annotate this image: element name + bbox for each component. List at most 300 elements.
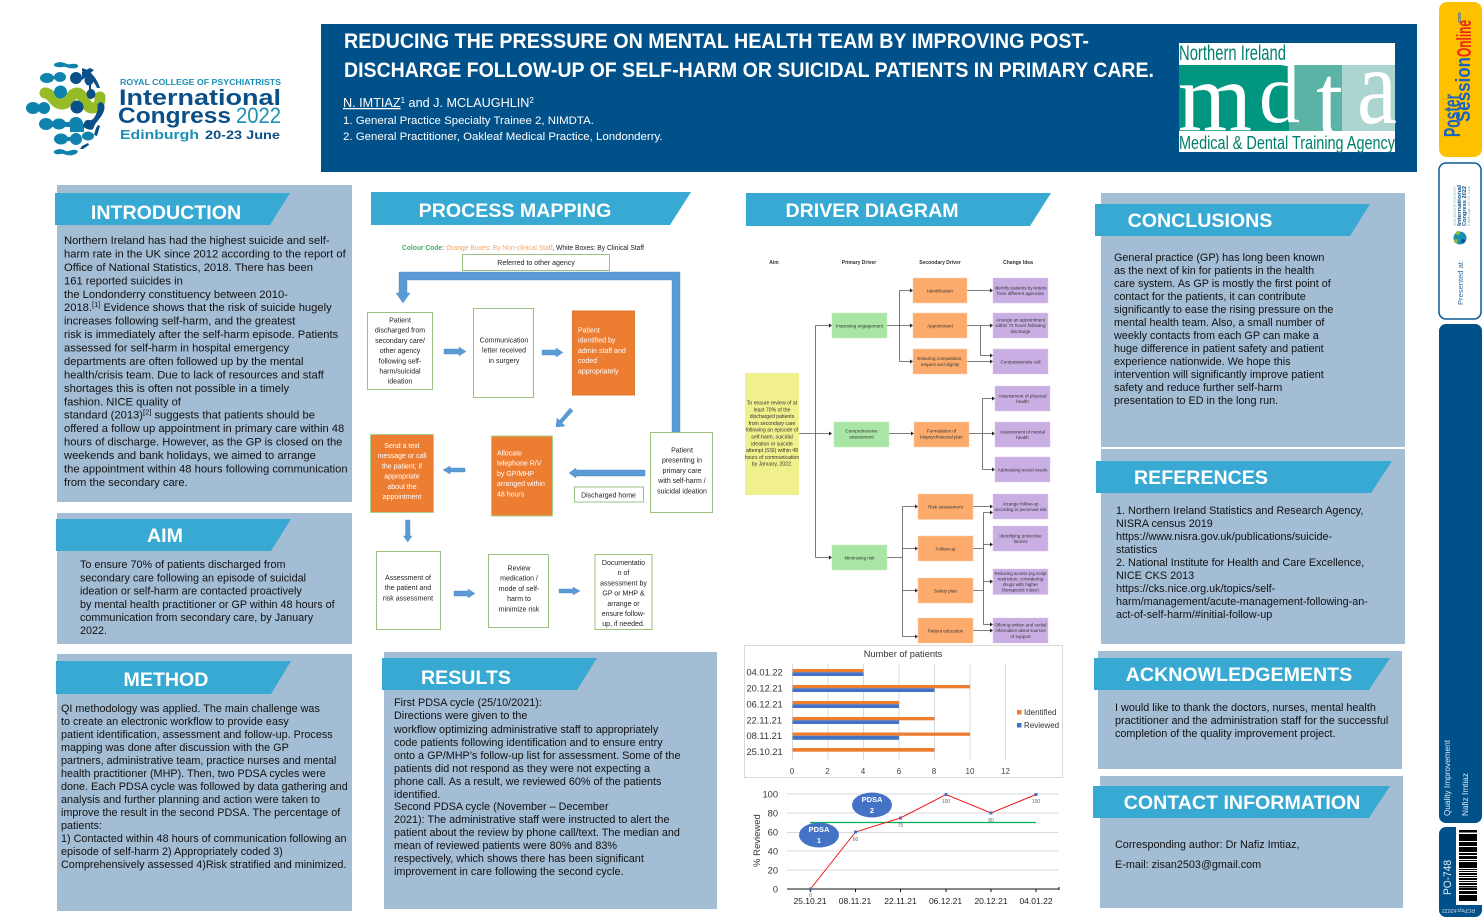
box: allocate telephone review: by GP/MHP	[497, 471, 534, 478]
box: patient presenting	[650, 432, 712, 512]
box: assessment: Assessment of	[385, 575, 431, 582]
text: results: onto a GP/MHP’s follow-up list for assessment. Some of the	[394, 750, 680, 762]
secondary drivers: biopsychosocial plan	[920, 434, 963, 440]
text: references: https://www.nisra.gov.uk/publications/suicide-	[1116, 531, 1333, 543]
heading: introduction: INTRODUCTION	[91, 202, 241, 224]
value axis labels	[790, 767, 1010, 776]
callout: PDSA 2: 2	[870, 806, 874, 815]
box: patient discharged: harm/suicidal	[379, 368, 421, 376]
text: results: patients did not respond as they were not expecting a	[394, 763, 651, 775]
barcode	[1456, 827, 1482, 905]
text: references: 2. National Institute for Health and Care Excellence,	[1116, 557, 1364, 569]
change ideas: discharge	[1011, 329, 1031, 334]
text: introduction: Northern Ireland has had the highest suicide and self-	[64, 235, 330, 247]
box: documentation: arrange or	[607, 601, 640, 608]
text: introduction: Evidence shows that the risk of suicide hugely	[100, 302, 332, 314]
change ideas: Identify patients by letters	[994, 286, 1047, 290]
box: patient presenting: presenting in	[662, 458, 702, 465]
x axis labels	[793, 896, 1053, 906]
text: acknowledgements: completion of the quality improvement project.	[1115, 728, 1336, 740]
y axis labels: 80	[768, 808, 778, 818]
change ideas	[993, 278, 1050, 643]
authors and affiliations: 2. General Practitioner, Oakleaf Medical Practice, Londonderry.	[343, 131, 663, 143]
text: method: mapping was done after discussion with the GP	[61, 742, 289, 754]
value axis labels: 4	[861, 767, 866, 776]
chart: number of patients bar chart	[744, 646, 1062, 778]
legend: Reviewed	[1024, 721, 1059, 730]
text: introduction: increases following self-harm, and the greatest	[64, 316, 296, 328]
box: patient identified: identified by	[578, 338, 616, 345]
aim box: ideation or suicide	[751, 441, 793, 447]
secondary drivers: Safety plan	[934, 588, 957, 594]
text: results: mean of reviewed patients were 80% and 83%	[394, 840, 617, 852]
value axis labels: 8	[932, 767, 937, 776]
category labels: 25.10.21	[746, 747, 783, 757]
box: documentation	[595, 554, 652, 630]
panel: aim	[56, 513, 352, 644]
text: results: patient about the review by phone call/text. The median and	[394, 827, 680, 839]
text: conclusions: significantly to ease the rising pressure on the	[1114, 304, 1333, 316]
y axis labels: 40	[768, 846, 778, 856]
text: contact details: Corresponding author: Dr Nafiz Imtiaz,	[1115, 839, 1300, 851]
callout: PDSA 1: 1	[817, 836, 821, 845]
aim box: discharged patients	[750, 414, 795, 420]
heading: process mapping: PROCESS MAPPING	[419, 200, 611, 222]
panel: contact information	[1093, 776, 1403, 908]
text: conclusions: mental health team. Also, a small number of	[1114, 317, 1325, 329]
box: patient identified: appropriately	[578, 368, 619, 375]
bars: identified	[792, 669, 970, 752]
change ideas: factors	[1014, 539, 1028, 544]
secondary drivers: Appointment	[927, 324, 954, 328]
heading: results	[382, 658, 597, 690]
heading: method: METHOD	[124, 669, 208, 691]
aim box: least 70% of the	[754, 407, 791, 413]
text: method: health practitioner (MHP). Then, two PDSA cycles were	[61, 768, 326, 780]
heading: results: RESULTS	[421, 667, 511, 689]
secondary drivers: Formulation of	[927, 428, 957, 434]
legend: Identified	[1024, 708, 1056, 717]
aim box: hours of communication	[745, 455, 799, 461]
box: patient discharged: discharged from	[375, 328, 425, 335]
aim box: To ensure review of at	[747, 400, 798, 406]
logo text: ROYAL COLLEGE OF PSYCHIATRISTS	[120, 77, 281, 87]
heading: driver diagram: DRIVER DIAGRAM	[785, 200, 959, 222]
chart: percent reviewed line chart	[752, 790, 1059, 906]
box: review medication: minimize risk	[499, 606, 540, 613]
callout: PDSA 1: PDSA	[809, 825, 830, 834]
text: references: https://cks.nice.org.uk/topics/self-	[1116, 583, 1276, 595]
logo text: 20-23 June	[205, 128, 280, 142]
box: review medication: Review	[508, 566, 531, 572]
text: introduction: the appointment within 48 hours following communication	[64, 464, 348, 476]
text: references: 1. Northern Ireland Statistics and Research Agency,	[1116, 505, 1363, 517]
category labels: 06.12.21	[746, 700, 783, 710]
change ideas: Reducing access (eg script	[994, 571, 1047, 576]
box: send a text message	[370, 434, 434, 512]
text: references: NICE CKS 2013	[1116, 570, 1194, 582]
text: introduction: [2]	[143, 408, 151, 417]
box: patient identified: coded	[578, 358, 597, 365]
change ideas: information about sources	[996, 628, 1046, 633]
logo: NIMDTA: Medical & Dental Training Agency	[1179, 133, 1395, 153]
box: assessment: risk assessment	[383, 595, 433, 602]
sidebar: presented at tab: Presented at:	[1456, 260, 1465, 305]
arrow	[454, 589, 475, 598]
change ideas: Assessment of mental	[1000, 430, 1045, 434]
title: REDUCING THE PRESSURE ON MENTAL HEALTH TEAM BY IMPROVING POST-	[344, 28, 1089, 53]
sidebar: poster number and barcode	[1439, 827, 1482, 917]
change ideas: health	[1016, 435, 1029, 440]
text: results: Second PDSA cycle (November – December	[394, 801, 609, 813]
text: aim: 2022.	[80, 625, 107, 637]
text: results: code patients following identification and to ensure entry	[394, 737, 663, 749]
text: method	[61, 703, 348, 871]
secondary drivers: Ensuring compassion,	[917, 356, 963, 361]
value axis labels: 12	[1001, 767, 1010, 776]
icon: congress brain globe	[26, 62, 104, 155]
box: patient discharged: ideation	[388, 379, 412, 386]
callout: PDSA 2	[852, 792, 892, 818]
heading: acknowledgements: ACKNOWLEDGEMENTS	[1126, 664, 1352, 686]
category labels: 08.11.21	[746, 731, 782, 741]
secondary drivers: Patient education	[928, 628, 964, 634]
text: references: statistics	[1116, 544, 1158, 556]
column headings: Secondary Driver	[919, 260, 961, 266]
x axis labels: 08.11.21	[839, 896, 871, 906]
text: method: done. Each PDSA cycle was followed by data gathering and	[61, 781, 348, 793]
box: patient discharged: Patient	[389, 318, 411, 324]
column headings: Change Idea	[1003, 260, 1033, 266]
text: method: to create an electronic workflow to provide easy	[61, 716, 289, 728]
data labels: 100	[1032, 799, 1040, 805]
change ideas: from different agencies	[997, 291, 1045, 296]
text: method: Comprehensively assessed 4)Risk stratified and minimized.	[61, 859, 346, 871]
text: introduction: fashion. NICE quality of	[64, 396, 182, 408]
sidebar: poster title tab: Nafiz Imtiaz	[1460, 773, 1470, 816]
sidebar: poster session online tab	[1439, 2, 1482, 157]
heading: conclusions	[1095, 204, 1370, 236]
arrow	[569, 468, 645, 478]
text: results: identified.	[394, 789, 440, 801]
change ideas: Arrange an appointment	[996, 318, 1046, 322]
logo text: International	[119, 85, 281, 110]
arrow: diagonal	[556, 408, 573, 427]
logo: Royal College of Psychiatrists International Congress 2022	[26, 62, 281, 155]
primary drivers: Improving engagement	[836, 324, 884, 328]
text: method: improve the result in the second PDSA. The percentage of	[61, 807, 341, 819]
y axis title: % Reviewed	[752, 814, 763, 867]
logo text: 2022	[236, 103, 281, 128]
text: aim: secondary care following an episode of suicidal	[80, 572, 306, 584]
heading: conclusions: CONCLUSIONS	[1128, 210, 1272, 232]
aim box: self-harm, suicidal	[751, 434, 793, 440]
secondary drivers: Identification	[927, 288, 953, 294]
sidebar: poster number and barcode: RCPsych2022	[1442, 907, 1475, 913]
panel: results	[382, 652, 717, 909]
text: aim: communication from secondary care, by January	[80, 612, 314, 624]
box: patient identified: Patient	[578, 328, 600, 334]
box: communication letter: letter received	[482, 348, 526, 355]
category labels: 04.01.22	[746, 668, 783, 678]
logo: NIMDTA: Northern Ireland	[1179, 42, 1286, 65]
box: assessment: the patient and	[385, 585, 431, 592]
change ideas: restriction, considering	[998, 576, 1044, 582]
box: review medication	[488, 554, 548, 628]
change ideas: according to perceived risk	[994, 507, 1047, 512]
box: review medication: harm to	[507, 596, 531, 603]
primary drivers: Minimizing risk	[844, 556, 875, 560]
sidebar: poster number and barcode: PO-748	[1442, 860, 1454, 895]
heading: process mapping	[371, 192, 691, 225]
change ideas: Assessment of physical	[998, 394, 1046, 398]
data labels: 80	[988, 818, 994, 824]
text: references: harm/management/acute-management-following-an-	[1116, 596, 1368, 608]
heading: references: REFERENCES	[1134, 467, 1268, 489]
text: introduction: assessed for self-harm in hospital emergency	[64, 342, 290, 354]
legend	[1017, 708, 1059, 730]
authors and affiliations	[343, 96, 663, 143]
heading: references	[1096, 461, 1392, 493]
x axis labels: 22.11.21	[884, 896, 917, 906]
box: send a text message: message or call	[377, 453, 427, 460]
arrow	[542, 348, 563, 357]
y axis labels: 60	[768, 828, 778, 838]
x axis labels: 20.12.21	[974, 896, 1008, 906]
text: results: Directions were given to the	[394, 710, 527, 722]
chart: process map flow	[368, 245, 712, 630]
value axis labels: 2	[825, 767, 830, 776]
box: review medication: medication /	[500, 576, 538, 583]
change ideas: Arrange follow-up	[1002, 502, 1039, 506]
text: results: respectively, which shows there has been significant	[394, 853, 644, 865]
text: introduction: [1]	[92, 300, 100, 309]
box: allocate telephone review: arranged within	[497, 481, 545, 488]
y axis labels: 100	[762, 790, 778, 800]
box: referred to other agency: Referred to other agency	[497, 260, 575, 267]
box: patient presenting: with self-harm /	[657, 478, 706, 485]
heading: method	[56, 661, 291, 694]
logo: NIMDTA: t	[1316, 42, 1343, 159]
mini logo text: International	[1457, 184, 1463, 226]
data labels: 0	[809, 893, 812, 899]
heading: aim: AIM	[147, 525, 183, 547]
logo text: Edinburgh	[120, 128, 199, 142]
panel: references	[1096, 449, 1405, 644]
x axis labels: 06.12.21	[929, 896, 962, 906]
secondary drivers: respect and dignity	[921, 362, 960, 367]
text: references: NISRA census 2019	[1116, 518, 1213, 530]
text: results	[393, 697, 680, 878]
value axis labels: 0	[790, 767, 795, 776]
logo: NIMDTA: a	[1357, 28, 1397, 147]
box: referred to other agency	[462, 254, 610, 270]
text: introduction: risk is immediately after the self-harm episode. Patients	[64, 329, 339, 341]
arrow: referral loop	[396, 272, 680, 432]
heading: aim	[56, 519, 291, 551]
data line	[810, 794, 1036, 889]
change ideas: within 72 hours following	[995, 323, 1046, 328]
authors and affiliations: N. IMTIAZ	[343, 96, 401, 110]
text: results: First PDSA cycle (25/10/2021):	[394, 697, 542, 709]
text: conclusions: presentation to ED in the long run.	[1114, 395, 1278, 407]
text: introduction: weekends and bank holidays, we aimed to arrange	[63, 450, 316, 462]
text: contact details	[1115, 839, 1300, 871]
text: conclusions	[1113, 252, 1333, 407]
panel: title banner	[321, 24, 1417, 172]
box: documentation: Documentatio	[602, 560, 645, 567]
y axis labels: 20	[768, 866, 778, 876]
sidebar: poster title tab: Quality Improvement	[1442, 739, 1452, 816]
box: allocate telephone review: telephone R/V	[497, 461, 542, 468]
category labels: 20.12.21	[746, 684, 783, 694]
text: conclusions: experience nationwide. We hope this	[1114, 356, 1291, 368]
data markers	[809, 793, 1038, 890]
box: communication letter	[474, 308, 534, 398]
box: patient discharged: secondary care/	[375, 338, 425, 345]
change ideas: Offering written and verbal	[994, 622, 1046, 628]
heading: introduction	[55, 193, 290, 225]
text: introduction: 2018.	[64, 302, 92, 314]
box: send a text message: appropriate	[384, 474, 420, 481]
box: patient identified	[572, 311, 634, 395]
secondary drivers: Follow-up	[936, 546, 956, 552]
box: documentation: n of	[618, 570, 629, 577]
text: introduction: offered a follow up appointment in primary care within 48	[64, 423, 344, 435]
box: assessment	[376, 552, 440, 630]
text: method: partners, administrative team, practice nurses and mental	[61, 755, 336, 767]
logo text: Congress	[118, 103, 231, 128]
text: introduction: suggests that patients should be	[151, 410, 315, 422]
text: conclusions: huge difference in patient safety and patient	[1114, 343, 1324, 355]
heading: driver diagram	[746, 193, 1051, 226]
x axis labels: 25.10.21	[793, 896, 827, 906]
box: documentation: up, if needed.	[602, 621, 645, 628]
text: acknowledgements: practitioner and the administration staff for the successful	[1115, 715, 1388, 727]
legend: colour code: Colour Code: Orange Boxes: By Non-clinical Staff, White Boxes: By Clinical Staff	[402, 245, 644, 252]
box: patient presenting: primary care	[663, 468, 702, 475]
text: introduction: harm rate in the UK since 2012 according to the report of	[64, 248, 347, 260]
data labels: 75	[898, 823, 903, 829]
mini logo text	[1453, 184, 1471, 226]
text: method: 1) Contacted within 48 hours of communication following an	[61, 833, 346, 845]
text: conclusions: intervention will significantly improve patient	[1114, 369, 1324, 381]
aim box: from secondary care	[749, 421, 796, 427]
mini logo text: ROYAL COLLEGE OF PSYCHIATRISTS	[1453, 186, 1457, 226]
text: introduction: hours of discharge. However, as the GP is closed on the	[64, 437, 342, 449]
text: results: workflow optimizing administrative staff to appropriately	[393, 724, 659, 736]
x axis labels: 04.01.22	[1019, 896, 1053, 906]
text: results: phone call. As a result, we reviewed 60% of the patients	[394, 776, 662, 788]
column headings: Aim	[769, 260, 779, 266]
panel: introduction	[55, 185, 352, 502]
box: discharged home: Discharged home	[581, 492, 636, 500]
secondary drivers	[913, 278, 973, 643]
authors and affiliations: 2	[529, 96, 534, 105]
box: send a text message: Send a text	[384, 443, 420, 450]
text: references: act-of-self-harm/#initial-follow-up	[1116, 609, 1272, 621]
logo: NIMDTA: d	[1259, 47, 1300, 141]
heading: contact information: CONTACT INFORMATION	[1124, 792, 1360, 814]
text: conclusions: General practice (GP) has long been known	[1114, 252, 1324, 264]
box: review medication: mode of self-	[499, 586, 540, 593]
box: patient discharged: following self-	[379, 358, 422, 365]
heading: acknowledgements	[1094, 658, 1390, 690]
text: aim: by mental health practitioner or GP within 48 hours of	[80, 599, 336, 611]
arrow	[559, 587, 580, 595]
text: introduction: standard (2013)	[64, 410, 143, 422]
text: aim: To ensure 70% of patients discharged from	[80, 559, 286, 571]
box: patient discharged	[368, 312, 432, 390]
text: introduction	[63, 235, 348, 489]
change ideas: therapeutic index)	[1002, 588, 1039, 592]
category labels	[746, 668, 783, 757]
chart title: Number of patients	[864, 649, 943, 659]
text: method: patient identification, assessment and follow-up. Process	[61, 729, 333, 741]
sidebar: presented at tab	[1439, 163, 1481, 319]
box: send a text message: appointment	[383, 494, 421, 501]
change ideas: Addressing social needs	[998, 468, 1048, 472]
data labels: 100	[942, 799, 950, 805]
mini logo text: Congress 2022	[1462, 186, 1468, 226]
box: patient identified: admin staff and	[578, 348, 626, 355]
text: method: patients:	[61, 820, 102, 832]
box: patient discharged: other agency	[380, 348, 421, 355]
text: conclusions: care system. As GP is mostly the first point of	[1114, 278, 1332, 290]
box: discharged home	[574, 487, 644, 502]
text: introduction: the Londonderry constituency between 2010-	[64, 289, 288, 301]
box: communication letter: Communication	[480, 338, 528, 344]
change ideas: health	[1016, 399, 1029, 404]
text: method: analysis and further planning and action were taken to	[61, 794, 320, 806]
authors and affiliations: 1	[401, 96, 406, 105]
text: introduction: shortages this is often not possible in a timely	[64, 383, 290, 395]
panel: method	[56, 654, 352, 911]
text: results: 2021): The administrative staff were instructed to alert the	[394, 814, 669, 826]
box: documentation: GP or MHP &	[602, 591, 645, 598]
sidebar: poster session online tab: Session	[1453, 57, 1475, 122]
heading: contact information	[1093, 786, 1390, 818]
text: aim: ideation or self-harm are contacted proactively	[80, 586, 302, 598]
aim box: by January, 2022.	[752, 462, 792, 468]
text: introduction: health/crisis team. Due to lack of resources and staff	[64, 369, 325, 381]
text: results: improvement in care following the second cycle.	[394, 866, 624, 878]
change ideas: of support	[1010, 634, 1031, 639]
text: conclusions: weekly contacts from each GP can make a	[1113, 330, 1320, 342]
text: aim	[80, 559, 336, 637]
y axis labels	[762, 790, 778, 894]
data labels	[809, 799, 1040, 899]
logo: NIMDTA: m	[1178, 44, 1252, 152]
text: method: QI methodology was applied. The main challenge was	[61, 703, 320, 715]
text: conclusions: safety and reduce further self-harm	[1114, 382, 1282, 394]
text: introduction: departments are often followed up by the mental	[64, 356, 303, 368]
panel: conclusions	[1095, 193, 1405, 447]
y axis labels: 0	[773, 884, 778, 894]
panel: acknowledgements	[1094, 651, 1402, 769]
text: introduction: Office of National Statistics, 2018. There has been	[64, 262, 313, 274]
value axis labels: 6	[897, 767, 902, 776]
box: send a text message: the patient, if	[382, 463, 422, 470]
bars: reviewed	[792, 672, 934, 740]
title	[344, 28, 1154, 82]
primary drivers	[832, 313, 889, 570]
column headings	[769, 260, 1033, 266]
box: patient presenting: suicidal ideation	[657, 488, 707, 495]
box: allocate telephone review	[492, 436, 552, 516]
text: acknowledgements	[1115, 702, 1388, 740]
box: communication letter: in surgery	[489, 358, 520, 365]
